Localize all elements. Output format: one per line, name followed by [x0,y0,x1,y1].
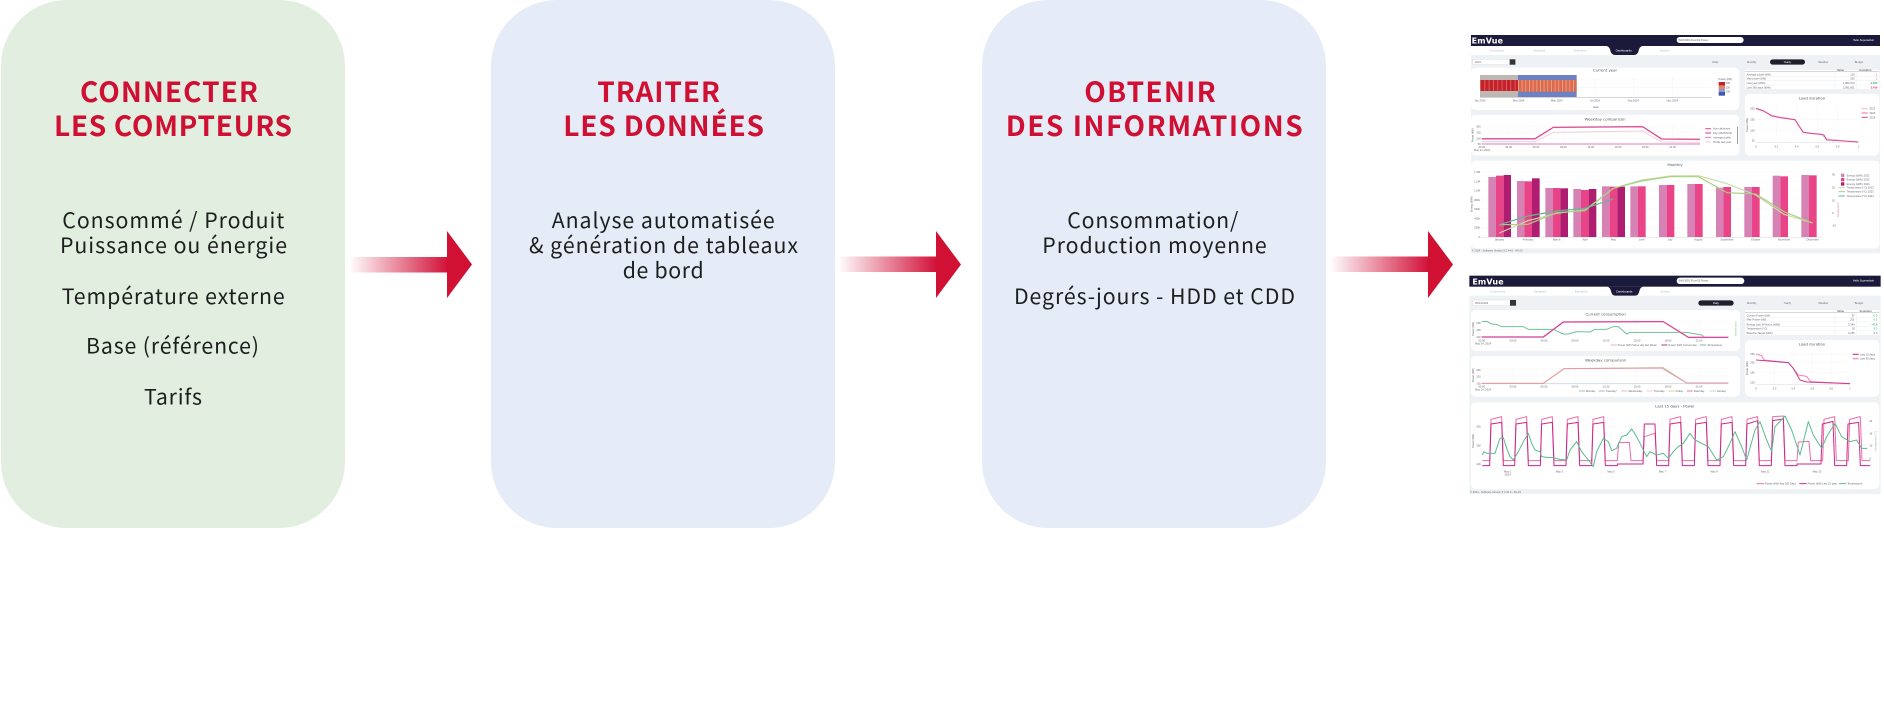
card: weekday comparison: Weekday comparison [1585,357,1627,362]
card: current consumption: 21:00 [1696,339,1703,343]
text block: informations [1014,204,1295,311]
card: weekday comparison: Day (2024/5/14) [1713,131,1732,135]
legend: current consumption: Temperature [1707,343,1723,347]
card: load duration: Last 90 days [1860,357,1876,361]
card: load duration: 0.8 [1836,145,1840,149]
power series and temperature [1482,416,1874,467]
card: monthly bars: November [1778,237,1790,241]
card: weekday comparison: 03:00 [1510,385,1517,389]
card: current year heatmap: Nov 2024 [1667,99,1679,103]
card: monthly bars: 0 [1479,235,1481,239]
card: load duration: 100 [1750,380,1755,384]
legend: monthly [1838,173,1874,198]
card: current year heatmap: 100 [1726,90,1731,94]
navigation tabs: Dashboards [1616,48,1632,52]
date selector and period buttons: Yearly [1784,60,1792,64]
card: monthly bars: May [1611,237,1617,241]
card: monthly bars: 600k [1474,207,1481,211]
card: current consumption: 100 [1476,335,1481,339]
dashboard screenshot 1: monthly view [1470,35,1880,253]
card: weekday comparison: 09:00 [1572,385,1579,389]
navigation tabs: Connectors [1490,289,1506,293]
card: current year heatmap [1471,68,1739,110]
card: current consumption [1471,310,1740,351]
card: KPI table: 120 [1850,72,1855,76]
card: current year heatmap: Sep 2024 [1628,99,1640,103]
card: weekday comparison: 100 [1476,136,1481,140]
card: load duration: 0.4 [1795,145,1799,149]
card: KPI table: 1 [1876,77,1878,81]
heading: traiter les données: TRAITER [597,71,720,111]
card: load duration: 200 [1750,107,1755,111]
card: last 15 days power: May 1 [1504,469,1512,473]
card: current consumption: 15:00 [1634,339,1641,343]
card: load duration: 250 [1750,352,1755,356]
navigation tabs: Elements [1574,48,1587,52]
legend: weekday: Thursday [1654,389,1665,393]
heading: obtenir des informations: DES INFORMATIONS [1006,105,1303,145]
legend: monthly: Temperature (°C) 2024 [1847,194,1874,198]
dashboard header bar: BMS.BD1.Floor02.Power [1679,38,1708,42]
card: load duration: 0.6 [1810,386,1815,390]
card: last 15 days power: 20 [1869,419,1873,423]
text block: inputs: Température externe [62,280,285,311]
legend: current consumption: Power (kW) Same day last Week [1618,343,1657,347]
card: current year heatmap: Jan 2024 [1475,99,1486,103]
arrow 1 [349,231,472,298]
legend: weekday: Monday [1586,389,1596,393]
text block: inputs: Consommé / Produit [62,204,284,235]
legend: monthly: Energy (kWh) 2023 [1847,178,1870,182]
date selector and period buttons: Daily [1713,301,1720,305]
card: current consumption: 18:00 [1665,339,1672,343]
card: weekday comparison: 06:00 [1541,385,1548,389]
card: weekday comparison: 00:00 [1478,145,1486,149]
text block: analyse: & génération de tableaux [529,229,798,260]
card: load duration: 0.2 [1773,386,1777,390]
panel: connecter les compteurs [1,0,345,528]
card: last 15 days power: 15 [1869,431,1873,435]
card: monthly bars: -10 [1832,224,1836,228]
card: current consumption: 200 [1476,321,1481,325]
card: monthly bars: 200k [1474,225,1481,229]
card: monthly bars: 800k [1474,198,1481,202]
heading: obtenir des informations: OBTENIR [1084,71,1216,111]
footer text: © 2024 - Software Version 5.3.44.0 - 6A-23 [1472,249,1523,253]
card: last 15 days power: Temperature (°C) [1874,431,1878,451]
card: KPI table: 1,081,801 [1843,85,1855,89]
card: KPI table: 0.0 [1874,331,1878,335]
date selector and period buttons: Monthly [1747,301,1757,305]
text block: analyse: Analyse automatisée [552,204,775,235]
card: weekday comparison [1471,356,1740,397]
card: last 15 days power: May 7 [1659,469,1666,473]
text block: analyse: de bord [623,254,704,285]
text block: inputs [60,204,287,412]
card: current consumption: Current consumption [1585,311,1626,316]
card: KPI table: -4,000 [1870,81,1878,85]
text block: inputs: Base (référence) [86,330,259,360]
legend: monthly: Energy (kWh) 2024 [1847,182,1870,186]
card: KPI table: Value [1837,309,1844,313]
heading: traiter les données: LES DONNÉES [563,105,764,145]
card: monthly bars: October [1751,237,1761,241]
card: KPI table: Current Power (kW) [1747,313,1770,317]
card: KPI table: Max Power (kW) [1747,318,1766,322]
date selector and period buttons [1473,59,1863,65]
dashboard header bar: BMS.BD1.Floor02.Power [1679,279,1708,283]
card: load duration: 0 [1755,386,1757,390]
dashboard header bar [1469,276,1881,287]
card: load duration: 2022 [1869,107,1876,111]
card: KPI table: Evolution [1859,68,1872,72]
card: current year heatmap: 200 [1726,81,1731,85]
heading: connecter les compteurs: LES COMPTEURS [54,105,292,145]
legend: monthly: Temperature (°C) 2023 [1847,190,1874,194]
card: KPI table: 1,084,070 [1843,81,1855,85]
navigation tabs: Dashboards [1616,289,1633,293]
card: monthly bars: Temperature [1836,202,1840,217]
card: monthly bars: December [1807,237,1819,241]
date selector and period buttons: Weather [1818,301,1828,305]
card: KPI table: Max power (kW) [1747,77,1766,81]
legend: weekday: Sunday [1717,389,1727,393]
card: weekday comparison: Profile last year [1713,140,1731,144]
dashboard screenshot 2: daily view [1469,276,1881,494]
card: last 15 days power: Last 15 days - Power [1655,404,1695,409]
card: weekday comparison [1470,115,1739,156]
card: monthly bars: August [1694,237,1703,241]
card: current consumption: 06:00 [1541,339,1548,343]
card: weekday comparison: 150 [1476,374,1481,378]
bars: energy 2023 [1496,175,1817,237]
card: weekday comparison: Average profile [1713,135,1731,139]
card: current consumption: 12:00 [1603,339,1610,343]
card: last 15 days power: May 9 [1710,469,1718,473]
card: monthly bars: June [1639,237,1645,241]
bars: energy 2024 [1504,175,1625,237]
card: last 15 days power: 5 [1869,456,1871,460]
dashboard header bar: EmVue [1472,277,1504,286]
card: KPI table: 1 [1876,72,1878,76]
navigation tabs: Variables [1534,289,1547,293]
dashboard header bar [1471,35,1880,46]
panel: obtenir des informations [982,0,1326,528]
text block: informations: Consommation/ [1067,204,1239,235]
legend: current consumption: Power (kW) Current day [1668,343,1697,347]
card: weekday comparison: Hour allotment [1713,127,1731,131]
card: last 15 days power [1471,402,1879,489]
dashboard header bar: Hello Superadmin [1853,38,1875,42]
card: weekday comparison: 200 [1476,368,1481,372]
panel: traiter les données [491,0,835,528]
card: monthly bars: Energy (kWh) [1470,196,1474,212]
card: load duration: 200 [1750,361,1755,365]
legend: last 15 days [1757,482,1863,486]
card: weekday comparison: 150 [1476,131,1481,135]
date selector and period buttons: Daily [1712,60,1719,64]
date selector and period buttons: Budget [1855,301,1863,305]
card: current year heatmap: Power (kW) [1718,77,1732,81]
card: weekday comparison: 12:00 [1603,385,1610,389]
card: weekday comparison: Weekday comparison [1584,116,1626,121]
card: load duration: 150 [1750,371,1755,375]
card: KPI table: 200 [1850,77,1855,81]
card: current consumption: May 14, 2024 [1475,342,1492,346]
card: KPI table: -47.9 [1871,322,1878,326]
card: last 15 days power: May 5 [1607,469,1615,473]
card: KPI table: 3,349 [1848,322,1855,326]
legend: last 15 days: Temperature [1847,482,1863,486]
date selector and period buttons [1473,300,1863,306]
card: current consumption: Temperature [1734,321,1738,336]
card: weekday comparison: 00:00 [1478,385,1486,389]
card: weekday comparison: 09:00 [1560,145,1567,149]
navigation tabs [1490,287,1671,296]
card: current consumption: 00:00 [1478,339,1486,343]
footer text: © 2024 - Software Version 5.3.44.0 - 6A-23 [1470,490,1521,494]
navigation tabs [1489,46,1670,55]
card: load duration: 50 [1752,138,1755,142]
date selector and period buttons: 05/14/2024 [1475,301,1489,305]
card: load duration: 100 [1750,128,1755,132]
card: weekday comparison: 15:00 [1615,145,1622,149]
card: load duration: 0.6 [1815,145,1820,149]
card: load duration [1745,340,1879,397]
heading: connecter les compteurs: CONNECTER [80,71,258,111]
card: KPI table: Baseline Target (kWh) [1747,331,1773,335]
card: monthly bars: 1.0M [1474,189,1480,193]
card: last 15 days power: 2024 [1505,473,1511,477]
arrow 2 [838,231,961,298]
legend: weekday [1579,389,1727,393]
card: KPI table: 201 [1850,318,1855,322]
card: weekday comparison: 21:00 [1669,145,1677,149]
text block: analyse [529,204,798,285]
text block: informations: Degrés-jours - HDD et CDD [1014,280,1295,311]
legend: weekday: Saturday [1694,389,1705,393]
card: monthly bars: January [1495,237,1505,241]
card: last 15 days power: 10 [1869,444,1873,448]
card: weekday comparison: 15:00 [1634,385,1641,389]
legend: weekday: Tuesday* [1606,389,1617,393]
date selector and period buttons: Yearly [1784,301,1792,305]
card: last 15 days power: 150 [1476,443,1481,447]
card: KPI table: Energy Last 24 Hours (kWh) [1747,322,1780,326]
navigation tabs: Variables [1533,48,1546,52]
card: last 15 days power: 200 [1476,425,1481,429]
heading: traiter les données [563,71,764,145]
legend: last 15 days: Power (kW) Avg 365 Days [1765,482,1797,486]
card: monthly bars: September [1720,237,1734,241]
card: KPI table: 97 [1852,313,1855,317]
legend: weekday: Friday [1676,389,1684,393]
date selector and period buttons: 2024 [1475,60,1481,64]
card: current year heatmap: Mar 2024 [1513,99,1525,103]
card: current consumption: 150 [1476,328,1481,332]
card: KPI table: 4,155 [1848,331,1855,335]
card: weekday comparison: 100 [1476,381,1481,385]
legend: monthly: Temperature (°C) 2022 [1847,186,1874,190]
card: KPI table: Evolution [1860,309,1872,313]
card: weekday comparison: 21:00 [1696,385,1703,389]
navigation tabs: System [1660,48,1670,52]
navigation tabs: Elements [1575,289,1588,293]
card: weekday comparison: 18:00 [1642,145,1649,149]
card: load duration: 2023 [1869,111,1876,115]
card: weekday comparison: 06:00 [1533,145,1540,149]
card: weekday comparison: 200 [1476,125,1481,129]
date selector and period buttons: Monthly [1747,60,1757,64]
card: last 15 days power: May 11 [1761,469,1770,473]
card: current year heatmap: Jul 2024 [1590,99,1601,103]
card: monthly bars: 30 [1832,173,1835,177]
card: current year heatmap: May 2024 [1551,99,1563,103]
text block: informations: Production moyenne [1042,229,1267,260]
card: load duration [1745,94,1879,156]
card: KPI table: Last 365 days (kWh) [1747,85,1771,89]
card: monthly bars: 1.4M [1474,170,1480,174]
card: load duration: 2024 [1869,115,1876,119]
card: monthly bars: March [1553,237,1561,241]
date selector and period buttons: Budget [1855,60,1863,64]
card: monthly bars: February [1523,237,1534,241]
date selector and period buttons: Weather [1818,60,1828,64]
card: monthly bars: 10 [1832,198,1835,202]
legend: last 15 days: Power (kW) Last 15 days [1808,482,1838,486]
text block: inputs: Puissance ou énergie [60,229,287,260]
card: weekday comparison: Power (kW) [1470,128,1474,142]
dashboard header bar: Hello Superadmin [1853,279,1875,283]
card: weekday comparison: Power (kW) [1471,368,1475,382]
card: weekday comparison: 12:00 [1587,145,1595,149]
dashboard header bar: EmVue [1472,36,1504,45]
bars: energy 2022 [1488,175,1809,237]
card: load duration: 1 [1849,386,1851,390]
card: KPI table [1745,309,1879,335]
card: last 15 days power: Power (kW) [1471,434,1475,448]
card: last 15 days power: 100 [1476,462,1481,466]
arrow 3 [1330,231,1453,298]
card: current consumption: Power (kW) [1471,322,1475,336]
card: load duration: 0 [1755,145,1757,149]
card: weekday comparison: 18:00 [1665,385,1672,389]
card: monthly bars: Monthly [1667,162,1683,167]
navigation tabs: System [1660,289,1671,293]
card: current consumption: 09:00 [1572,339,1579,343]
temperature lines [1499,176,1813,233]
card: load duration: Load duration [1799,96,1826,101]
card: load duration: 1 [1858,145,1860,149]
card: weekday comparison: May 14, 2024 [1474,148,1491,152]
legend: weekday: Wednesday [1628,389,1643,393]
card: KPI table: Last year (kWh) [1747,81,1766,85]
card: KPI table: -0.3 [1873,318,1878,322]
card: last 15 days power: May 13 [1813,469,1822,473]
card: KPI table: -3.3 [1873,327,1878,331]
card: load duration: Power (kW) [1745,361,1749,375]
card: load duration: 0.2 [1774,145,1779,149]
card: monthly bars: April [1582,237,1588,241]
heading: obtenir des informations [1006,71,1303,145]
card: monthly bars: 20 [1832,186,1835,190]
card: monthly bars: 400k [1474,216,1481,220]
card: load duration: 0.4 [1791,386,1796,390]
card: current year heatmap: Date [1593,105,1599,109]
card: KPI table: -0.9 [1873,313,1878,317]
card: load duration: Power (kW) [1745,118,1749,132]
card: load duration: 0.8 [1829,386,1833,390]
card: weekday comparison: 03:00 [1505,145,1513,149]
navigation tabs: Connectors [1489,48,1505,52]
heading: connecter les compteurs [54,71,292,145]
card: KPI table: Value [1837,68,1844,72]
card: weekday comparison: 50 [1478,142,1481,146]
card: load duration: 150 [1750,118,1755,122]
card: monthly bars: July [1668,237,1673,241]
legend: current consumption [1611,343,1723,347]
card: KPI table: 16 [1852,327,1855,331]
card: KPI table: Average power (kW) [1747,72,1771,76]
card: KPI table: Temperature (°C) [1747,327,1767,331]
card: current year heatmap: 150 [1726,85,1731,89]
card: KPI table [1745,68,1879,89]
card: load duration: Last 15 days [1860,352,1876,356]
text block: inputs: Tarifs [144,380,202,412]
card: current consumption: 03:00 [1510,339,1517,343]
card: last 15 days power: May 3 [1556,469,1563,473]
card: load duration: Load duration [1799,342,1826,347]
card: monthly bars [1470,161,1879,248]
card: monthly bars: 0 [1832,211,1834,215]
legend: monthly: Energy (kWh) 2022 [1847,173,1870,177]
card: KPI table: 3,499 [1871,85,1878,89]
card: monthly bars: 1.2M [1474,179,1480,183]
card: weekday comparison: May 14, 2024 [1475,388,1492,392]
card: current year heatmap: Current year [1593,68,1617,73]
